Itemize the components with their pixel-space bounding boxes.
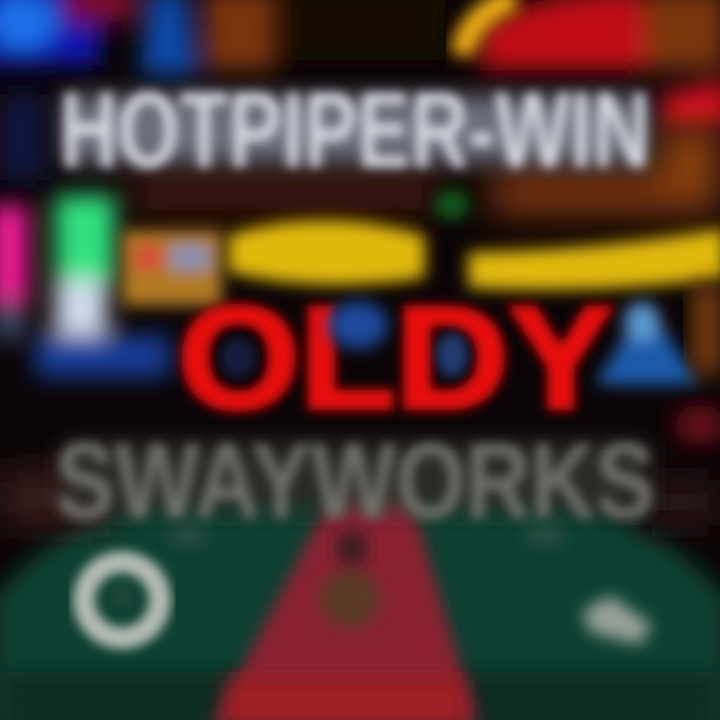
- icon: blue triangle: [595, 300, 700, 385]
- panel: yellow bar right: [468, 228, 720, 290]
- panel: orange post: [692, 285, 720, 375]
- panel: side seats: [0, 470, 720, 525]
- panel: green table: [0, 480, 720, 720]
- panel: table lower edge: [0, 672, 720, 720]
- icon: yellow arc light: [462, 0, 515, 55]
- icon: white ring: [84, 562, 160, 638]
- panel: brown wall band: [130, 125, 720, 215]
- panel: marquee box: [122, 230, 222, 306]
- panel: red table runner: [212, 465, 478, 720]
- icon: small table marks: [168, 523, 565, 547]
- panel: neon left signs: [0, 195, 170, 377]
- icon: centre emblem: [320, 568, 380, 628]
- icon: white chip: [582, 595, 652, 645]
- icon: green spot: [435, 190, 469, 220]
- panel: ceiling lights: [0, 0, 720, 180]
- panel: yellow bar left: [228, 220, 425, 285]
- heading: red OLDY: OLDY: [178, 276, 613, 439]
- panel: red side lights: [674, 405, 720, 445]
